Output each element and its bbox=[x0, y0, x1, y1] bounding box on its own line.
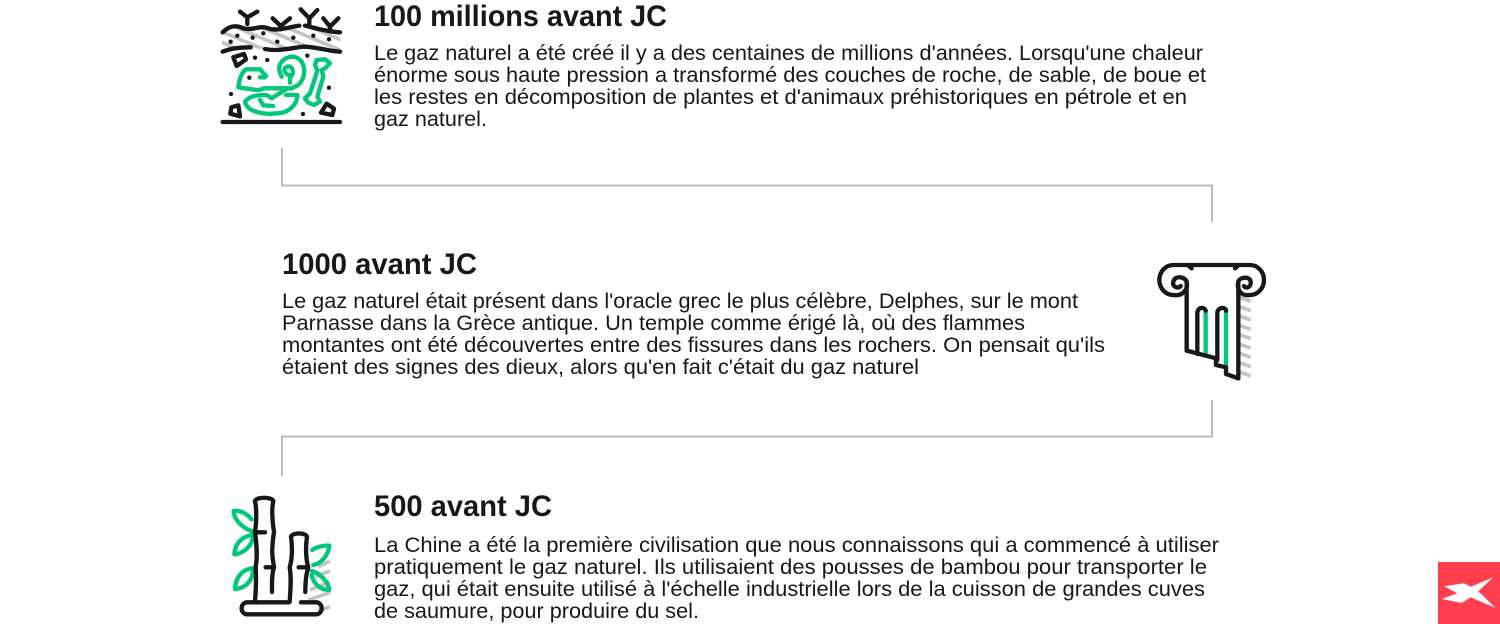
text block: 1000 avant JC: Parnasse dans la Grèce antique. Un temple comme érigé là, où des flammes bbox=[282, 312, 1025, 335]
icon: greek column bbox=[1159, 265, 1264, 378]
text block: 100 millions avant JC: les restes en décomposition de plantes et d'animaux préhistoriques en pétrole et en bbox=[374, 86, 1187, 109]
text block: 1000 avant JC bbox=[282, 290, 1105, 379]
icon: fossil underground bbox=[220, 7, 342, 124]
heading: 1000 avant JC: 1000 avant JC bbox=[282, 248, 477, 281]
text block: 500 avant JC: pratiquement le gaz naturel. Ils utilisaient des pousses de bambou pour transporter le bbox=[374, 556, 1207, 579]
text block: 100 millions avant JC bbox=[374, 42, 1206, 131]
text block: 500 avant JC: La Chine a été la première civilisation que nous connaissons qui a commencé à utiliser bbox=[374, 534, 1219, 557]
text block: 500 avant JC: gaz, qui était ensuite utilisé à l'échelle industrielle lors de la cuisson de grandes cuves bbox=[374, 578, 1205, 601]
text block: 1000 avant JC: étaient des signes des dieux, alors qu'en fait c'était du gaz naturel bbox=[282, 356, 919, 379]
logo bbox=[1438, 562, 1500, 624]
text block: 1000 avant JC: Le gaz naturel était présent dans l'oracle grec le plus célèbre, Delphes, sur le mont bbox=[282, 290, 1078, 313]
text block: 1000 avant JC: montantes ont été découvertes entre des fissures dans les rochers. On pensait qu'ils bbox=[282, 334, 1105, 357]
heading: 100 millions avant JC: 100 millions avant JC bbox=[374, 0, 667, 33]
connector: second to third bbox=[282, 400, 1212, 476]
icon: bamboo bbox=[234, 498, 330, 614]
text block: 500 avant JC: de saumure, pour produire du sel. bbox=[374, 600, 699, 623]
text block: 100 millions avant JC: Le gaz naturel a été créé il y a des centaines de millions d'années. Lorsqu'une chaleur bbox=[374, 42, 1203, 65]
text block: 100 millions avant JC: gaz naturel. bbox=[374, 108, 487, 131]
text block: 100 millions avant JC: énorme sous haute pression a transformé des couches de roche, de sable, de boue et bbox=[374, 64, 1206, 87]
connector: first to second bbox=[282, 148, 1212, 222]
text block: 500 avant JC bbox=[374, 534, 1219, 623]
heading: 500 avant JC: 500 avant JC bbox=[374, 490, 552, 523]
